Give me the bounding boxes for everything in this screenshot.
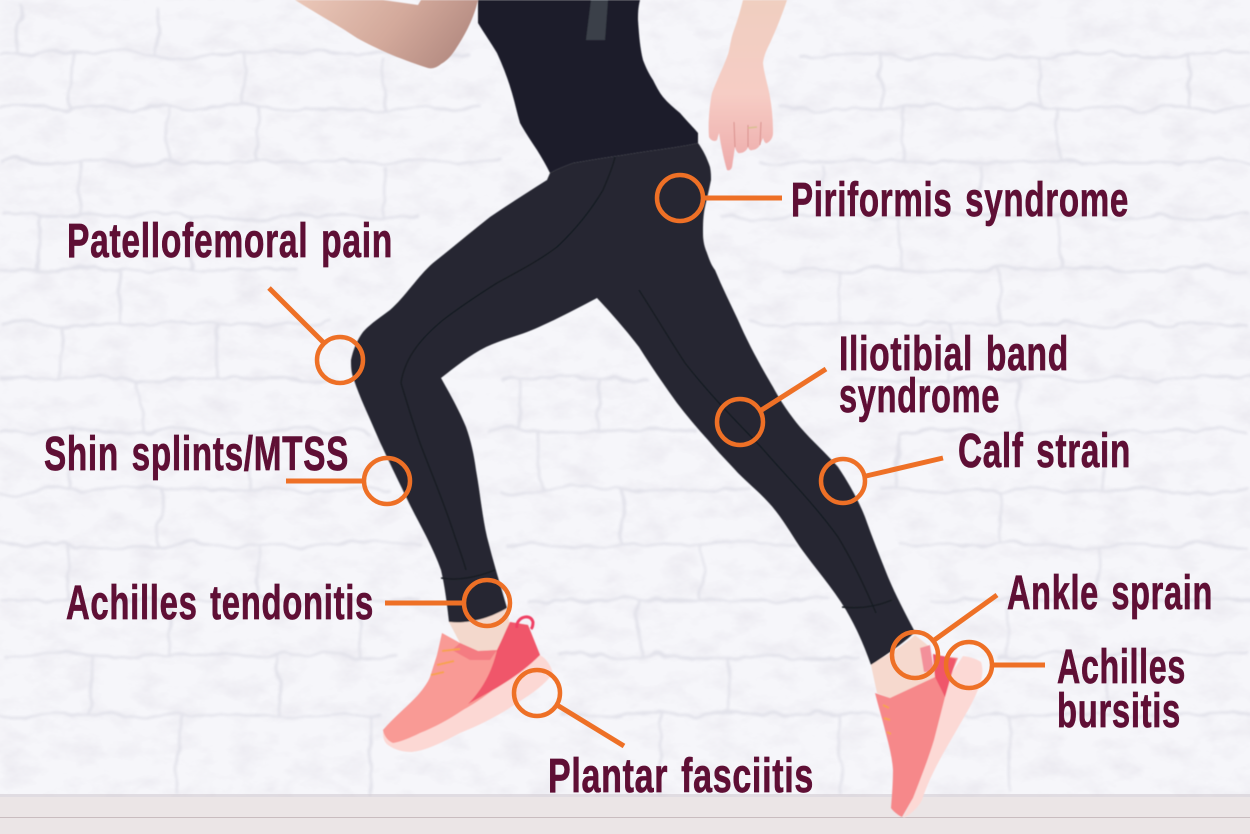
runner figure: [295, 0, 982, 818]
label: Achilles: [1057, 641, 1186, 694]
marker circle: [514, 670, 560, 716]
marker circle: [717, 399, 763, 445]
label: syndrome: [839, 370, 1000, 423]
top reflective stripe: [586, 0, 608, 40]
left ankle: [449, 608, 511, 651]
left shoe heel panel: [468, 622, 540, 704]
leader line: [269, 288, 324, 343]
marker circle: [364, 458, 410, 504]
label: Patellofemoral pain: [67, 215, 393, 268]
floor: [0, 794, 1250, 834]
label: Iliotibial band: [839, 328, 1069, 381]
leader line: [703, 196, 782, 200]
callout: Calf strain: [821, 425, 1131, 503]
label: Achilles tendonitis: [66, 577, 374, 630]
callout: Patellofemoral pain: [67, 215, 393, 383]
label: bursitis: [1057, 685, 1181, 738]
right shoe laces: [883, 705, 891, 734]
left shoe collar shading: [452, 643, 497, 660]
marker circle: [946, 642, 992, 688]
marker circle: [892, 632, 938, 678]
callout: Plantar fasciitis: [514, 670, 814, 803]
back arm: [295, 0, 478, 68]
right shoe upper: [875, 655, 958, 817]
black top: [478, 0, 698, 173]
callout: Achilles tendonitis: [66, 577, 510, 630]
callout: Shin splints/MTSS: [44, 428, 410, 504]
leader line: [993, 662, 1045, 668]
leader line: [760, 369, 826, 411]
label: Calf strain: [958, 425, 1131, 478]
callout: Achilles bursitis: [946, 641, 1186, 738]
label: Plantar fasciitis: [548, 750, 814, 803]
marker circle: [464, 580, 510, 626]
right leg ankle: [871, 635, 935, 698]
label: Shin splints/MTSS: [44, 428, 349, 481]
front arm and hand: [709, 0, 787, 170]
left shoe sole: [383, 655, 553, 752]
right shoe heel panel: [933, 654, 956, 697]
leader line: [933, 595, 997, 641]
left shoe heel loop: [517, 617, 533, 629]
leggings seams: [401, 157, 892, 613]
callout: Piriformis syndrome: [657, 174, 1129, 227]
leader line: [286, 478, 364, 484]
leader line: [385, 600, 464, 606]
marker circle: [657, 175, 703, 221]
left shoe laces: [431, 649, 460, 675]
leader line: [557, 705, 624, 746]
callout: Ankle sprain: [892, 567, 1213, 678]
right shoe sole: [903, 656, 982, 818]
leader line: [866, 458, 943, 476]
callout: Iliotibial band syndrome: [717, 328, 1069, 445]
marker circle: [821, 459, 865, 503]
left shoe upper: [383, 622, 540, 743]
marker circle: [317, 337, 363, 383]
leggings: [351, 143, 915, 665]
